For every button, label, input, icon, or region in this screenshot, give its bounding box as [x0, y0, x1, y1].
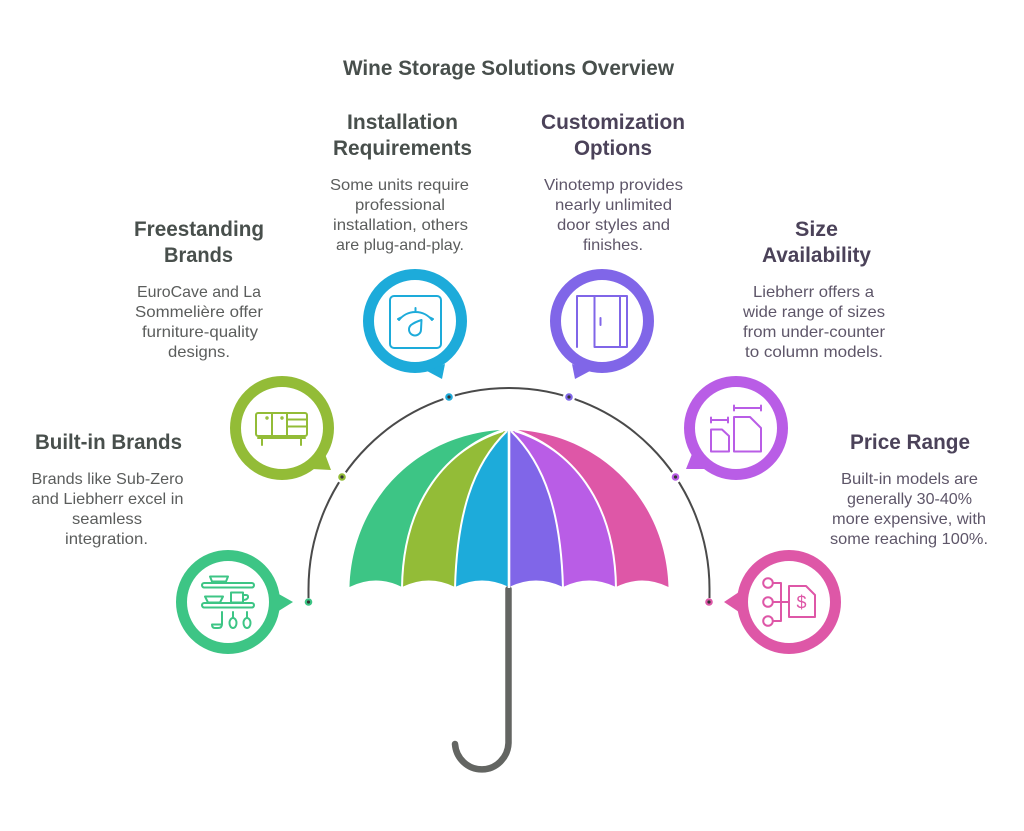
text block: freestanding brands: Freestanding	[134, 217, 264, 241]
bubble: price range document icon	[724, 556, 836, 648]
text block: size availability: to column models.	[745, 344, 883, 361]
text block: freestanding brands	[134, 217, 264, 361]
text block: freestanding brands: Sommelière offer	[135, 304, 263, 321]
canopy panel: pink	[518, 430, 668, 587]
text block: installation requirements: Requirements	[333, 136, 472, 160]
text block: installation requirements: professional	[355, 197, 445, 214]
text block: price range: some reaching 100%.	[830, 531, 988, 548]
text block: price range: generally 30-40%	[847, 491, 972, 508]
text block: freestanding brands: furniture-quality	[142, 324, 258, 341]
text block: built-in brands	[32, 430, 184, 548]
canopy panel: purple	[509, 431, 563, 587]
text block: freestanding brands: EuroCave and La	[137, 284, 261, 301]
text block: freestanding brands: designs.	[168, 344, 230, 361]
text block: customization options: Customization	[541, 110, 685, 134]
text block: price range	[830, 430, 988, 548]
bubble: size availability documents icon	[686, 382, 782, 474]
text block: built-in brands: and Liebherr excel in	[32, 491, 183, 508]
umbrella canopy	[350, 430, 668, 588]
text block: installation requirements	[330, 110, 472, 254]
canopy panel: olive	[402, 431, 507, 587]
text block: built-in brands: Brands like Sub-Zero	[32, 471, 184, 488]
bubble: freestanding brands cabinet icon	[236, 382, 331, 474]
text block: freestanding brands: Brands	[164, 243, 233, 267]
bubble: price range document icon: $	[796, 592, 807, 612]
text block: size availability: Availability	[762, 243, 871, 267]
canopy panel: violet	[511, 431, 616, 587]
text block: size availability: wide range of sizes	[742, 304, 885, 321]
canopy ribs	[402, 430, 616, 588]
text block: size availability: Liebherr offers a	[753, 284, 874, 301]
text block: customization options: Options	[574, 136, 652, 160]
title: Wine Storage Solutions Overview	[343, 56, 674, 80]
text block: price range: Price Range	[850, 430, 970, 454]
arc markers	[305, 391, 713, 606]
text block: built-in brands: integration.	[65, 531, 148, 548]
text block: size availability	[742, 217, 885, 361]
text block: customization options: finishes.	[583, 237, 643, 254]
text block: customization options	[541, 110, 685, 254]
text block: installation requirements: Installation	[347, 110, 458, 134]
text block: customization options: Vinotemp provides	[544, 177, 683, 194]
arc over the umbrella	[308, 388, 710, 598]
umbrella handle	[455, 589, 508, 769]
text block: size availability: from under-counter	[743, 324, 885, 341]
bubble: customization options door icon	[556, 274, 648, 379]
text block: customization options: nearly unlimited	[555, 197, 672, 214]
canopy panel: green	[350, 430, 500, 587]
bubble: built-in brands shelf icon	[182, 556, 293, 648]
text block: installation requirements: Some units require	[330, 177, 469, 194]
text block: size availability: Size	[795, 217, 838, 241]
text block: installation requirements: installation, others	[333, 217, 468, 234]
text block: built-in brands: Built-in Brands	[35, 430, 182, 454]
canopy panel: blue	[455, 431, 509, 587]
text block: price range: more expensive, with	[832, 511, 986, 528]
text block: installation requirements: are plug-and-play.	[336, 237, 464, 254]
text block: customization options: door styles and	[557, 217, 670, 234]
bubble: installation requirements gauge icon	[368, 274, 462, 379]
text block: built-in brands: seamless	[72, 511, 142, 528]
text block: price range: Built-in models are	[841, 471, 978, 488]
